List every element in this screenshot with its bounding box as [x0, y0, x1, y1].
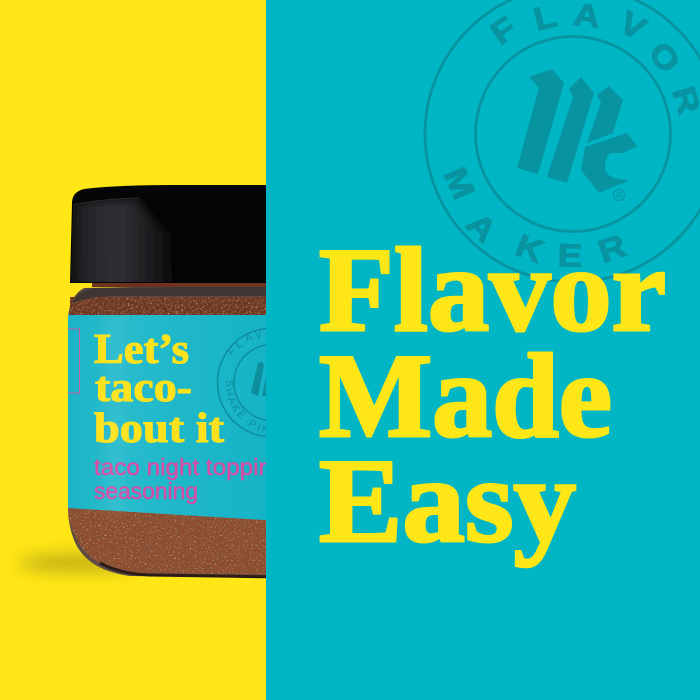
- watermark logo: [425, 0, 700, 282]
- jar base edge: [100, 563, 280, 577]
- logo ring text: O: [641, 36, 687, 80]
- label side panel: [68, 328, 80, 394]
- label descriptor: taco night toppin: [94, 454, 272, 480]
- headline: [319, 223, 666, 567]
- jar glass highlight: [107, 320, 121, 512]
- dark grain: [68, 297, 266, 574]
- jar lid: [70, 185, 270, 283]
- jar neck glass: [72, 287, 266, 304]
- headline: Made: [319, 329, 612, 462]
- lid soft sheen: [71, 199, 164, 282]
- logo rings: [425, 0, 700, 282]
- label seal text: I: [256, 422, 262, 434]
- spice powder and grain: [68, 297, 266, 575]
- yellow background panel: [0, 0, 266, 700]
- spice jar: [68, 185, 266, 578]
- label seal text: [225, 330, 266, 433]
- label descriptor: seasoning: [94, 478, 198, 504]
- label seal text: ·: [242, 415, 252, 426]
- powder base: [68, 508, 266, 575]
- light grain: [68, 297, 266, 574]
- logo monogram: [517, 69, 637, 193]
- label seal text: E: [234, 408, 248, 422]
- headline: Flavor: [319, 223, 666, 356]
- label headline: Let’s: [94, 327, 189, 373]
- logo ring text: M: [436, 162, 481, 205]
- label headline: bout it: [94, 406, 224, 452]
- powder top shade: [70, 297, 266, 315]
- logo ring text: V: [613, 5, 652, 48]
- label seal text: P: [246, 417, 258, 431]
- jar body: [68, 284, 280, 578]
- label seal mark: [251, 362, 267, 396]
- label headline: [94, 334, 224, 443]
- jar shadow: [18, 554, 142, 572]
- label seal: [216, 328, 266, 438]
- label seal text: H: [222, 387, 236, 397]
- label headline: taco-: [95, 365, 192, 411]
- logo ring text: R: [594, 228, 631, 270]
- label seal text: A: [243, 331, 254, 345]
- logo registered mark: [614, 190, 624, 200]
- label seal text: S: [223, 380, 235, 388]
- teal background panel: [266, 0, 700, 700]
- label band: [68, 315, 280, 521]
- label descriptor: [94, 454, 272, 504]
- logo ring text: F: [485, 10, 523, 52]
- logo ring text: A: [459, 206, 503, 250]
- lid top rim line: [73, 198, 140, 205]
- label seal text: F: [225, 345, 238, 358]
- logo ring text: K: [511, 228, 548, 270]
- neck powder line: [92, 283, 270, 287]
- logo ring text: [436, 0, 700, 274]
- label seal text: N: [261, 424, 270, 436]
- label seal text: L: [234, 338, 245, 351]
- label seal text: K: [229, 402, 242, 415]
- label seal text: V: [254, 328, 263, 342]
- headline: Easy: [319, 434, 576, 567]
- logo ring text: E: [557, 238, 583, 274]
- label seal text: A: [225, 395, 239, 406]
- logo registered mark: R: [616, 191, 622, 200]
